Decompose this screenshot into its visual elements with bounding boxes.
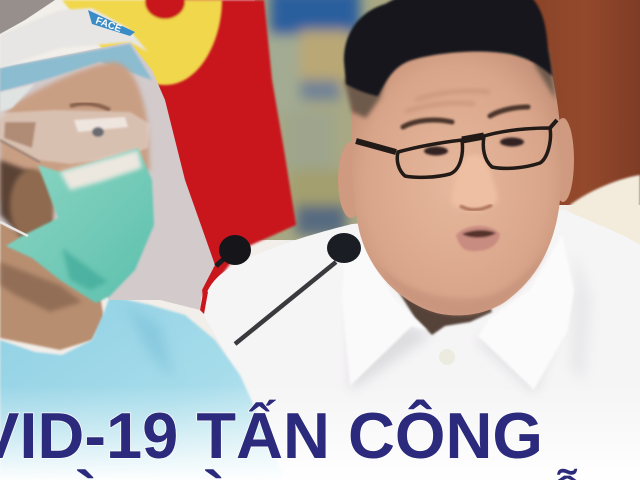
person right: hair — [344, 0, 552, 96]
person right: mouth — [456, 226, 500, 251]
person right: jaw shade — [375, 248, 548, 315]
flag: yellow emblem — [62, 0, 222, 85]
person right: right collar flap — [478, 235, 574, 390]
chair back — [560, 175, 640, 260]
person left: neck shadow — [0, 262, 82, 312]
person right: forehead wrinkles — [405, 91, 490, 112]
person left: scrub shading — [125, 305, 175, 380]
title: clipped second line — [64, 468, 588, 480]
person right: ears — [338, 118, 574, 218]
white jacket — [202, 210, 640, 480]
person left: hairnet — [0, 0, 55, 34]
person right: left collar flap — [342, 240, 428, 386]
person left: FACE label — [88, 10, 135, 36]
person left: side hair — [0, 160, 55, 250]
person left: mask — [6, 148, 154, 303]
person left: eyebrow — [70, 104, 110, 110]
person left: neck — [0, 222, 104, 350]
person right: glasses — [356, 120, 557, 177]
wood panel — [530, 0, 640, 205]
person left: face shield — [0, 42, 215, 310]
person right: neck shadow — [388, 275, 492, 335]
person left: mask shading — [62, 248, 108, 290]
person right: shirt button — [439, 349, 455, 365]
bottom white fade — [0, 385, 640, 480]
person right: hair fade — [344, 48, 556, 118]
flag: red panel — [150, 0, 296, 300]
microphone: large — [235, 233, 361, 344]
person right: nose — [452, 155, 498, 211]
person left: goggles — [0, 110, 150, 164]
person left: scrubs — [0, 296, 285, 480]
person right: eyes — [424, 138, 524, 156]
person left: hairnet lace — [0, 84, 35, 112]
person left: shield blue tint — [0, 44, 152, 92]
person left: face skin — [0, 62, 150, 230]
red sliver under shield — [200, 288, 208, 314]
person right: brows — [403, 107, 528, 127]
person right: collar shadow — [350, 250, 592, 395]
person left: mask top fold — [60, 150, 142, 190]
person left: ear — [10, 169, 54, 241]
person left: ear strap — [0, 222, 28, 236]
person right: nostrils — [460, 205, 492, 210]
microphone: small — [216, 235, 251, 266]
person right: face — [351, 50, 562, 315]
person left: shield band — [0, 8, 148, 68]
person left: FACE label: FACE — [94, 15, 123, 35]
